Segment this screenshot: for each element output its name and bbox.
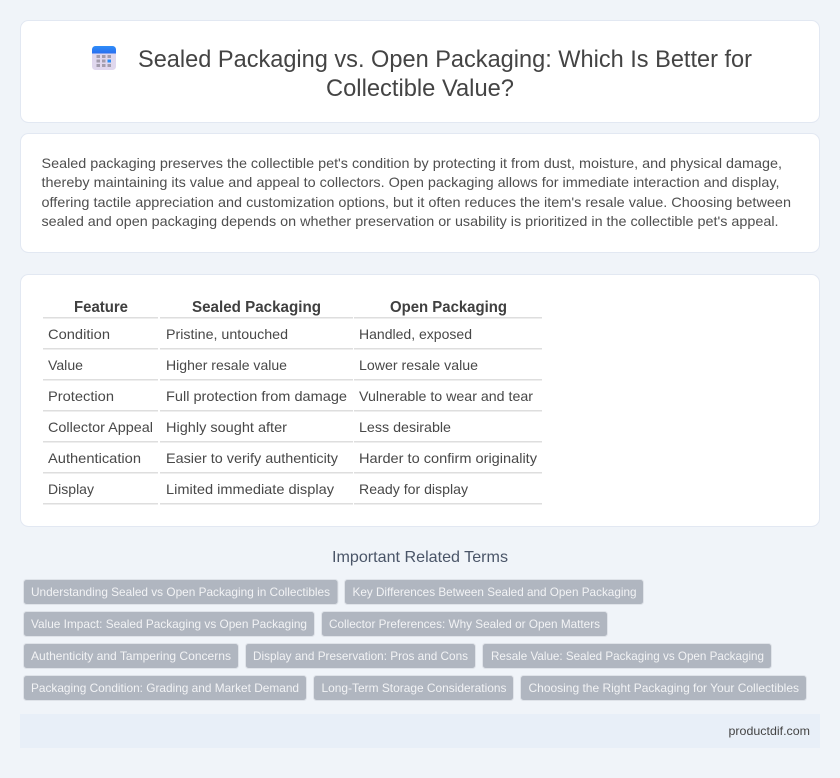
text block: summary: Sealed packaging preserves the collectible pet's condition by protecting it from dust, moisture, and physical damage, xyxy=(42,155,782,171)
tag: Display and Preservation: Pros and Cons xyxy=(253,649,468,663)
title: Sealed Packaging vs. Open Packaging: Which Is Better for xyxy=(138,46,752,73)
tag xyxy=(322,612,608,636)
table row: Authentication xyxy=(48,450,537,466)
tag: Collector Preferences: Why Sealed or Open Matters xyxy=(329,617,600,631)
text block: summary: thereby maintaining its value and appeal to collectors. Open packaging allows for immediate interaction and display, xyxy=(42,174,780,190)
table row: Protection: Protection xyxy=(48,388,114,404)
table row: Collector Appeal: Highly sought after xyxy=(166,419,287,435)
tag: Long-Term Storage Considerations xyxy=(322,681,506,695)
tag xyxy=(314,676,514,700)
table row: Display xyxy=(48,481,468,497)
table row: Value: Lower resale value xyxy=(359,357,478,373)
table row: Condition xyxy=(48,326,472,342)
icon: calendar xyxy=(92,46,116,70)
tag xyxy=(344,580,644,604)
table row: Protection: Vulnerable to wear and tear xyxy=(359,388,533,404)
footer text: productdif.com xyxy=(728,724,810,738)
tag xyxy=(24,676,306,700)
text block: summary: sealed and open packaging depends on whether preservation or usability is prioritized in the collectible pet's appeal. xyxy=(42,213,778,229)
table row: Collector Appeal xyxy=(48,419,451,435)
table row: Value: Higher resale value xyxy=(166,357,287,373)
table row: Value xyxy=(48,357,478,373)
tag xyxy=(520,676,806,700)
footer bar xyxy=(20,714,820,748)
tag: Understanding Sealed vs Open Packaging in Collectibles xyxy=(31,585,330,599)
table header xyxy=(74,299,507,316)
tag: Choosing the Right Packaging for Your Collectibles xyxy=(528,681,799,695)
tag xyxy=(246,644,476,668)
table rules xyxy=(43,317,542,504)
table header: Open Packaging xyxy=(390,299,507,316)
table row: Protection: Full protection from damage xyxy=(166,388,347,404)
tag xyxy=(24,644,238,668)
table row: Display: Display xyxy=(48,481,94,497)
table row: Display: Limited immediate display xyxy=(166,481,334,497)
tag: Key Differences Between Sealed and Open Packaging xyxy=(352,585,636,599)
table row: Condition: Condition xyxy=(48,326,110,342)
title: Collectible Value? xyxy=(326,75,514,102)
panel: title card xyxy=(20,20,820,122)
text block: summary xyxy=(42,155,791,229)
tag group: related terms xyxy=(24,580,806,700)
title xyxy=(138,46,752,102)
panel: comparison table xyxy=(20,274,820,526)
table row: Authentication: Easier to verify authenticity xyxy=(166,450,338,466)
tag: Resale Value: Sealed Packaging vs Open Packaging xyxy=(491,649,764,663)
tag xyxy=(24,612,314,636)
table header: Sealed Packaging xyxy=(192,299,321,316)
tag: Value Impact: Sealed Packaging vs Open Packaging xyxy=(31,617,307,631)
table row: Authentication: Harder to confirm originality xyxy=(359,450,537,466)
tag xyxy=(482,644,772,668)
table row: Authentication: Authentication xyxy=(48,450,141,466)
table row: Condition: Pristine, untouched xyxy=(166,326,288,342)
table row: Protection xyxy=(48,388,533,404)
table row: Condition: Handled, exposed xyxy=(359,326,472,342)
tag xyxy=(24,580,338,604)
table row: Collector Appeal: Less desirable xyxy=(359,419,451,435)
heading: related terms: Important Related Terms xyxy=(332,549,508,566)
table header: Feature xyxy=(74,299,128,316)
table row: Value: Value xyxy=(48,357,83,373)
panel: summary paragraph xyxy=(20,134,820,252)
tag: Packaging Condition: Grading and Market Demand xyxy=(31,681,299,695)
table row: Display: Ready for display xyxy=(359,481,468,497)
tag: Authenticity and Tampering Concerns xyxy=(31,649,231,663)
text block: summary: offering tactile appreciation and customization options, but it often reduces the item's resale value. Choosing between xyxy=(42,194,791,210)
table row: Collector Appeal: Collector Appeal xyxy=(48,419,153,435)
